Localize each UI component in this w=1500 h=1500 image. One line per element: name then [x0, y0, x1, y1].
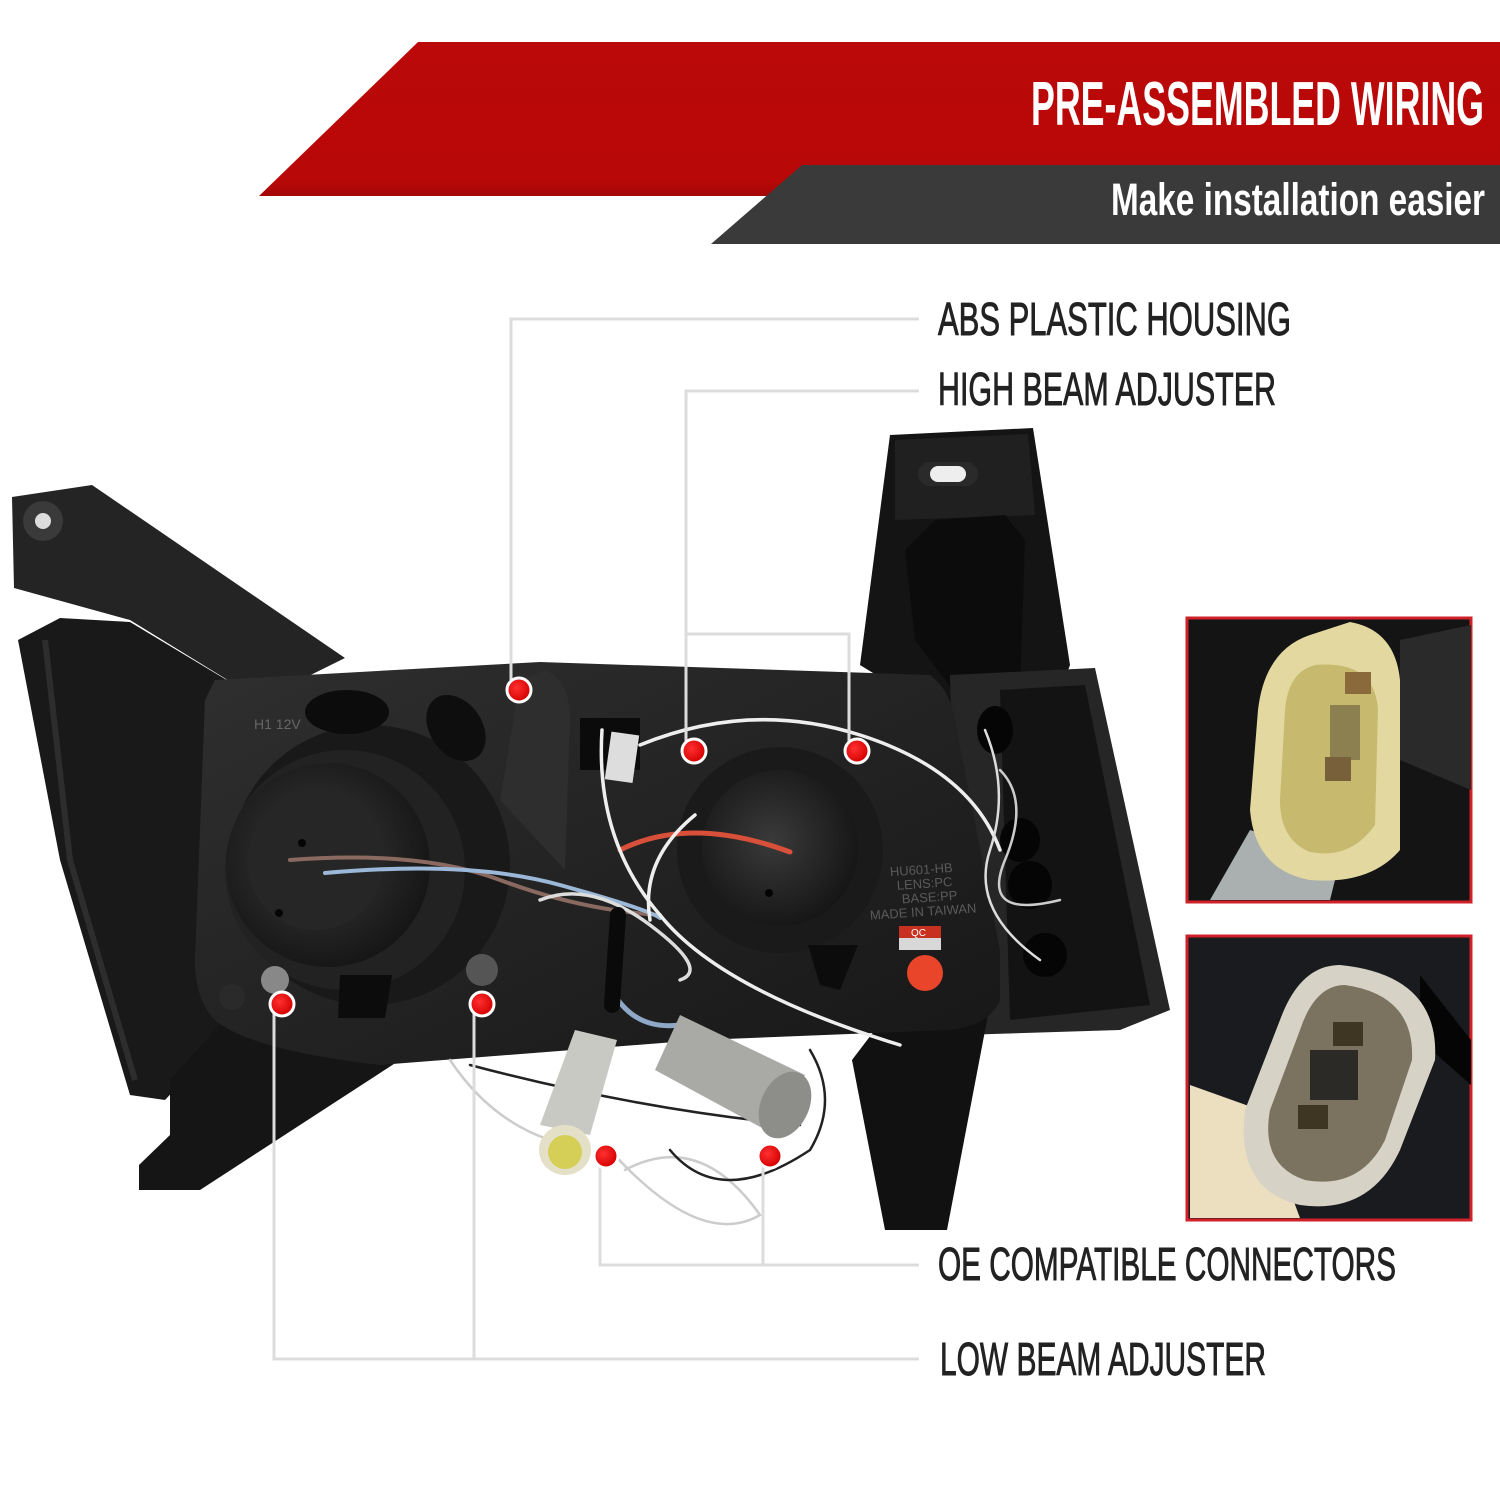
right upper bracket: [860, 428, 1070, 720]
moulded marking: H1 12V: [254, 716, 301, 732]
left mounting bracket: [12, 485, 345, 1100]
label: ABS plastic housing: ABS PLASTIC HOUSING: [938, 293, 1291, 345]
left lamp socket: [225, 725, 510, 1018]
inset: yellow connector: [1187, 618, 1471, 902]
main body: [195, 662, 1000, 1065]
banner: red header: [259, 42, 1500, 196]
QC sticker: QC: [911, 928, 926, 939]
moulded text: BASE:PP: [901, 888, 958, 907]
headlight illustration: [12, 428, 1170, 1230]
moulded text: MADE IN TAIWAN: [869, 900, 977, 923]
wiring: [290, 720, 1060, 1224]
moulded text: HU601-HB: [889, 860, 953, 879]
moulded text: LENS:PC: [896, 874, 953, 893]
connector: grey: [655, 1015, 822, 1147]
mounting screws: [219, 954, 498, 1010]
inset: grey connector: [1187, 936, 1471, 1220]
callout lines: [274, 319, 919, 1359]
left lower bracket: [139, 980, 400, 1190]
label: high beam adjuster: HIGH BEAM ADJUSTER: [938, 363, 1276, 415]
label: low beam adjuster: LOW BEAM ADJUSTER: [940, 1333, 1266, 1385]
centre rib: [500, 670, 570, 870]
banner: grey subheader: [711, 165, 1500, 244]
rubber plugs: [305, 684, 498, 772]
lower centre bracket: [852, 1010, 988, 1230]
right lens housing: [950, 668, 1170, 1035]
connector: yellow tipped: [539, 1030, 617, 1175]
wire bracket tag: [580, 718, 640, 783]
callout dots: [270, 678, 869, 1168]
right lamp socket: [677, 747, 883, 990]
QC sticker: [899, 926, 943, 991]
